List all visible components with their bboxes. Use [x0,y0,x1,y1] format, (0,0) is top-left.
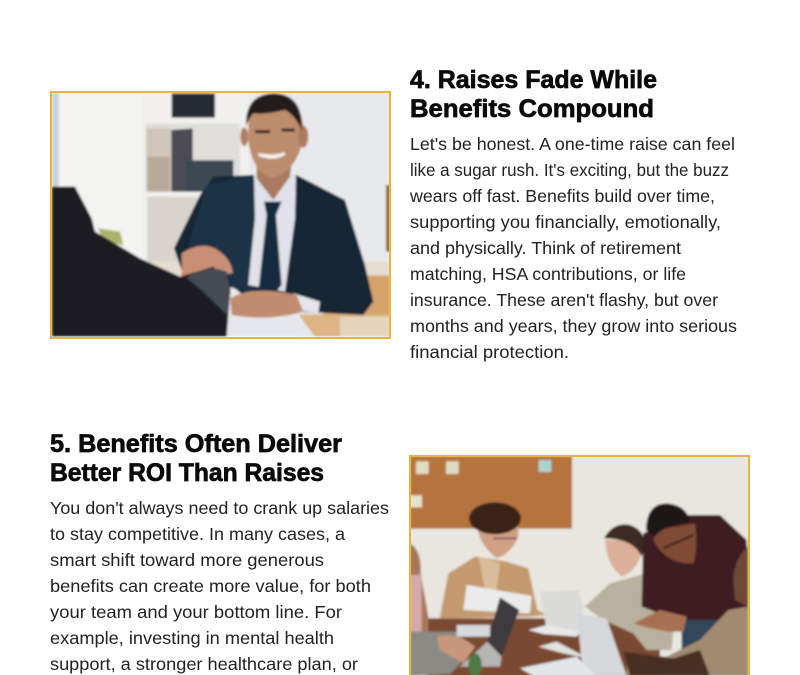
text block: section 4 body [409,134,737,362]
text block: section 5 body: You don't always need to crank up salaries [50,498,389,518]
heading: section 5: 5. Benefits Often Deliver [50,430,342,458]
text block: section 5 body: support, a stronger healthcare plan, or [50,654,358,674]
text block: section 5 body: to stay competitive. In many cases, a [50,524,345,544]
text block: section 5 body: benefits can create more value, for both [50,576,371,596]
text block: section 4 body: supporting you financially, emotionally, [410,212,721,232]
text block: section 4 body: matching, HSA contributions, or life [410,264,686,284]
text block: section 5 body: smart shift toward more generous [50,550,324,570]
text block: section 4 body: and physically. Think of retirement [410,238,681,258]
photo: handshake at interview desk [51,92,390,338]
heading: section 5 [50,430,342,487]
text block: section 5 body: example, investing in mental health [50,628,334,648]
text block: section 5 body: your team and your bottom line. For [50,602,342,622]
text block: section 4 body: insurance. These aren't flashy, but over [410,290,718,310]
heading: section 4 [410,66,657,123]
heading: section 5: Better ROI Than Raises [50,459,324,487]
text block: section 4 body: wears off fast. Benefits build over time, [409,186,715,206]
text block: section 4 body: Let's be honest. A one-time raise can feel [410,134,735,154]
text block: section 4 body: like a sugar rush. It's exciting, but the buzz [410,160,729,180]
text block: section 4 body: financial protection. [410,342,569,362]
heading: section 4: Benefits Compound [410,95,654,123]
photo: team meeting around table [410,456,749,675]
text block: section 5 body [50,498,389,674]
heading: section 4: 4. Raises Fade While [410,66,657,94]
text block: section 4 body: months and years, they grow into serious [410,316,737,336]
